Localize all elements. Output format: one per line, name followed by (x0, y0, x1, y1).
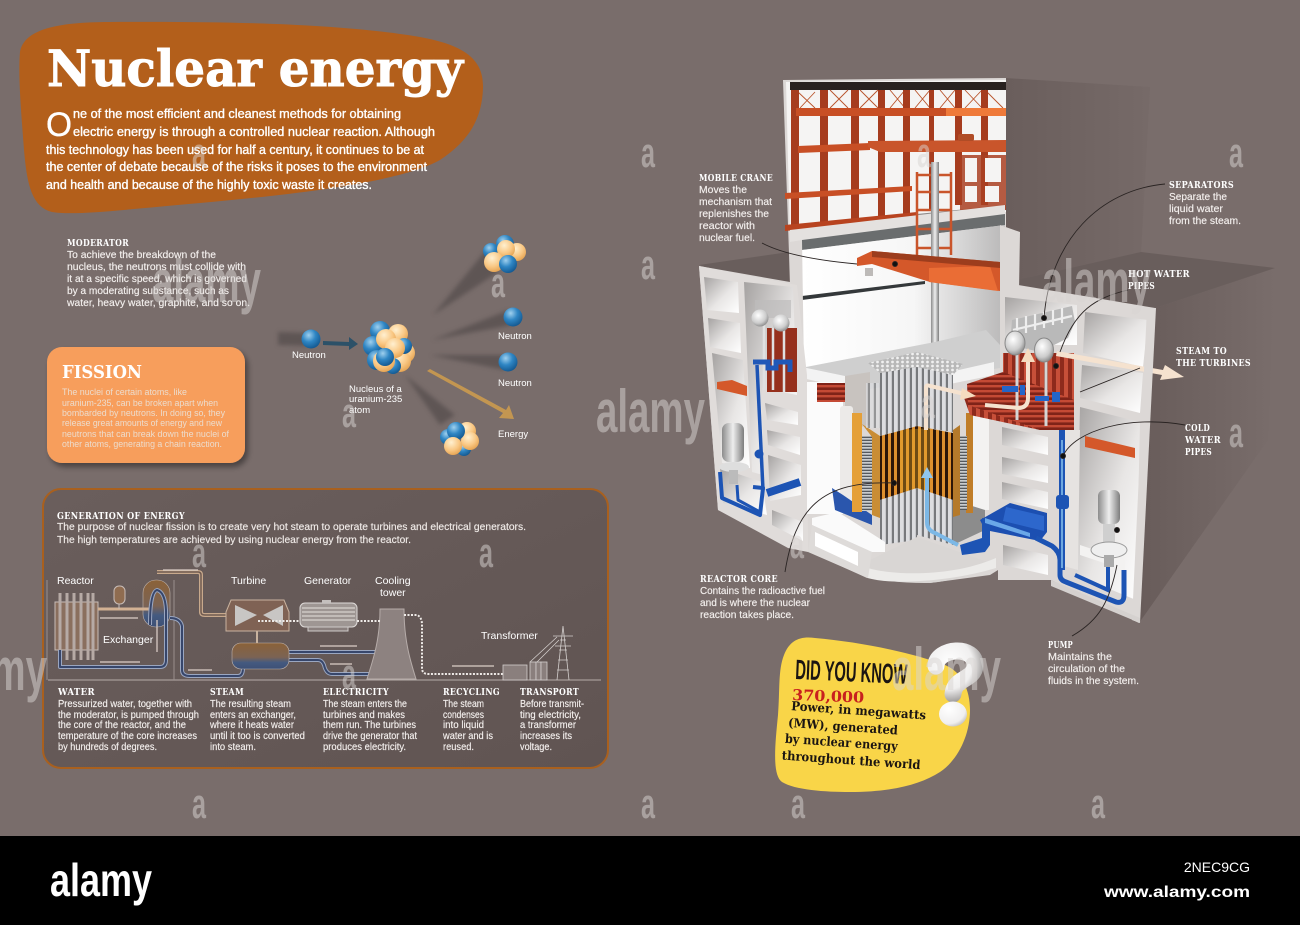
intro paragraph: O (46, 106, 72, 144)
crane rail upper (868, 140, 1006, 152)
watermarks: a (641, 780, 655, 827)
right rooms (1005, 297, 1148, 600)
reactor building cutaway (699, 78, 1275, 623)
column: recycling: The steam (443, 698, 484, 710)
reactor (55, 593, 98, 660)
column: steam (209, 688, 305, 753)
label: pump (1048, 641, 1139, 687)
panel: generation of energy: GENERATION OF ENERGY (57, 512, 185, 522)
left small crane (717, 380, 747, 396)
column: steam: until it too is converted (210, 730, 305, 742)
callout: did you know (775, 638, 975, 792)
transformer (503, 626, 573, 680)
watermarks (0, 129, 1243, 827)
watermarks: a (1229, 129, 1243, 176)
watermarks: a (1229, 409, 1243, 456)
right wall front edge (1132, 308, 1156, 623)
column: water: temperature of the core increases (58, 730, 197, 742)
column: recycling: condenses (443, 709, 484, 721)
diagram labels: Turbine (231, 575, 266, 587)
labels (292, 331, 532, 440)
footer bar (0, 836, 1300, 925)
intro paragraph: and health and because of the highly toxic waste it creates. (46, 178, 372, 192)
column: electricity: them run. The turbines (323, 719, 416, 731)
yellow blob (775, 638, 970, 792)
diagram labels (57, 575, 538, 646)
deck red pipes left (817, 383, 855, 402)
hot and cold pipes (60, 572, 405, 676)
watermarks: a (192, 129, 206, 176)
reactor deck (802, 330, 1000, 392)
rear upper wall (1006, 78, 1150, 285)
column: electricity: ELECTRICITY (323, 688, 389, 698)
leader lines (762, 184, 1185, 636)
big white room (807, 382, 843, 514)
heading: Nuclear energy: Nuclear energy (47, 39, 465, 98)
electricity lines (258, 615, 504, 674)
watermarks: alamy (892, 636, 1001, 703)
condenser (232, 643, 289, 669)
bottom edge strip (1051, 580, 1140, 623)
description (781, 698, 927, 772)
label: separators: Separate the (1169, 191, 1227, 203)
watermarks: alamy (596, 378, 705, 445)
column: steam: into steam. (210, 741, 256, 753)
left blue plenum (832, 488, 872, 525)
url: www.alamy.com (1103, 884, 1250, 901)
watermarks: a (192, 780, 206, 827)
label: reactor core: Contains the radioactive fuel (700, 585, 825, 597)
labels: uranium-235 (349, 394, 402, 405)
column: electricity (323, 688, 417, 753)
inner orange (862, 424, 880, 518)
mobile crane (857, 251, 1000, 291)
label: pump: fluids in the system. (1048, 675, 1139, 687)
label: pump: circulation of the (1048, 663, 1125, 675)
column: recycling: reused. (443, 741, 474, 753)
panel: fission: uranium-235, can be broken apart when (62, 398, 218, 408)
beams (796, 108, 1006, 116)
flow arrows (100, 570, 494, 670)
label: mobile crane: Moves the (699, 184, 747, 196)
label: mobile crane (699, 174, 773, 244)
left steam generator (752, 300, 797, 392)
neutron middle (498, 352, 518, 372)
panel: fission: The nuclei of certain atoms, like (62, 387, 187, 397)
label: hot water pipes (1128, 270, 1190, 292)
label: mobile crane: replenishes the (699, 208, 769, 220)
labels: Energy (498, 429, 528, 440)
label: pump: PUMP (1048, 641, 1073, 651)
blue pipes right (960, 430, 1124, 602)
column: recycling (442, 688, 500, 753)
diagram labels: Cooling (375, 575, 411, 587)
moderator text block: water, heavy water, graphite, and so on. (66, 297, 250, 309)
arrowhead: cold water (921, 467, 933, 478)
diagram labels: Reactor (57, 575, 94, 587)
watermarks: a (491, 259, 505, 306)
roof top right (1005, 252, 1275, 308)
label: separators (1169, 181, 1241, 227)
left blue pipes (720, 365, 800, 515)
moderator text block (66, 239, 250, 309)
column: transport: a transformer (520, 719, 576, 731)
labels: atom (349, 405, 370, 416)
watermarks: a (921, 380, 935, 427)
right steam generator (962, 306, 1075, 430)
column: steam: where it heats water (209, 719, 294, 731)
moderator text block: To achieve the breakdown of the (67, 249, 216, 261)
chart: fission chain reaction (278, 235, 532, 456)
label: cold water pipes: PIPES (1185, 448, 1212, 458)
fragment nucleus bottom (440, 422, 479, 456)
hall lower wall (790, 205, 1020, 375)
watermarks: a (1091, 780, 1105, 827)
label: mobile crane: reactor with (699, 220, 755, 232)
panel: fission: bombarded by neutrons. In doing so, they (62, 408, 225, 418)
labels: Neutron (498, 331, 532, 342)
fuel rods lower (880, 488, 917, 545)
reactor core (817, 352, 996, 583)
watermarks: alamy (1042, 248, 1151, 315)
arrow: neutron incoming (323, 337, 358, 350)
arrow: steam up (985, 362, 1028, 408)
image id: 2NEC9CG (1184, 859, 1250, 875)
arrow: steam through core (926, 385, 965, 430)
label: mobile crane: mechanism that (699, 196, 772, 208)
panel: generation of energy: The high temperatures are achieved by using nuclear energy from the reactor. (57, 534, 411, 546)
watermarks: a (641, 129, 655, 176)
generator (300, 600, 357, 631)
fuel slots (880, 426, 917, 500)
column: water (57, 688, 199, 753)
column: electricity: The steam enters the (323, 698, 407, 710)
column: water: WATER (57, 688, 95, 698)
neutron top (504, 308, 522, 326)
column: water: by hundreds of degrees. (58, 741, 157, 753)
column: transport (520, 688, 584, 753)
watermarks: a (641, 241, 655, 288)
description: (MW), generated (788, 715, 899, 738)
label: cold water pipes (1184, 424, 1221, 458)
column: transport: ting electricity, (520, 709, 581, 721)
fragment nucleus top (483, 235, 526, 273)
moderator text block: by a moderating substance, such as (67, 285, 229, 297)
exchanger vessel (143, 580, 170, 627)
labels: Neutron (498, 378, 532, 389)
panel: fission: release great amounts of energy and new (62, 418, 222, 428)
lower left platform (808, 512, 885, 578)
turbine (226, 600, 289, 631)
diagram labels: Transformer (481, 630, 538, 642)
base section silhouette (699, 78, 1155, 623)
label: hot water pipes: HOT WATER (1128, 270, 1190, 280)
label: separators: from the steam. (1169, 215, 1241, 227)
label: separators: SEPARATORS (1169, 181, 1234, 191)
label: steam to the turbines (1176, 347, 1251, 369)
column: water: Pressurized water, together with (58, 698, 192, 710)
separators (1010, 306, 1075, 352)
intro paragraph: this technology has been used for half a century, it continues to be at (46, 143, 425, 157)
label: pump: Maintains the (1048, 651, 1112, 663)
moderator text block: nucleus, the neutrons must collide with (67, 261, 246, 273)
panel: generation of energy (43, 489, 608, 768)
watermarks: a (479, 529, 493, 576)
title panel (19, 22, 483, 213)
intro paragraph: electric energy is through a controlled nuclear reaction. Although (73, 125, 435, 139)
left wall face (699, 266, 808, 552)
column: transport: Before transmit- (520, 698, 584, 710)
arrow: cold water in core (927, 475, 958, 545)
cooling tower (367, 609, 416, 679)
label: reactor core: reaction takes place. (700, 609, 794, 621)
panel: fission: FISSION (62, 362, 142, 383)
watermarks: a (342, 389, 356, 436)
right lower block side (1139, 268, 1275, 623)
label: reactor core: and is where the nuclear (700, 597, 810, 609)
column: steam: The resulting steam (210, 698, 291, 710)
orange header blob (19, 22, 483, 213)
column: transport: TRANSPORT (520, 688, 579, 698)
arrow: energy (427, 369, 514, 419)
watermarks: a (342, 650, 356, 697)
column: electricity: turbines and makes (323, 709, 405, 721)
floor arc (868, 537, 996, 583)
columns (791, 90, 988, 228)
label: steam to the turbines: STEAM TO (1176, 347, 1227, 357)
diagram: power plant (47, 570, 601, 680)
column: transport: voltage. (520, 741, 552, 753)
back gray behind core (953, 500, 985, 545)
labels: Nucleus of a (349, 384, 403, 395)
watermarks: a (917, 129, 931, 176)
label: reactor core: REACTOR CORE (700, 575, 778, 585)
watermarks: a (790, 520, 804, 567)
column: water: the core of the reactor, and the (58, 719, 186, 731)
icon: question mark (936, 651, 975, 726)
description: by nuclear energy (784, 731, 899, 754)
label: mobile crane: MOBILE CRANE (699, 174, 773, 184)
label: cold water pipes: WATER (1184, 436, 1221, 446)
diagram labels: Exchanger (103, 634, 154, 646)
description: Power, in megawatts (791, 698, 927, 722)
upper vessel (880, 410, 953, 436)
small tank (114, 586, 125, 604)
column: electricity: produces electricity. (323, 741, 406, 753)
rod top dots (868, 352, 963, 375)
watermarks: a (791, 780, 805, 827)
fuel rods upper (880, 366, 917, 436)
left pump (719, 423, 749, 484)
figure: 370,000: 370,000 (792, 686, 864, 707)
intro paragraph: the center of debate because of the risks it poses to the environment (46, 160, 428, 174)
label: separators: liquid water (1169, 203, 1223, 215)
label: mobile crane: nuclear fuel. (699, 232, 755, 244)
nucleus of uranium-235 (363, 321, 415, 374)
intro paragraph (46, 106, 435, 192)
mast ladder (917, 172, 952, 255)
trails (278, 250, 512, 425)
diagram labels: tower (380, 587, 406, 599)
right small crane (1085, 436, 1135, 458)
watermarks: alamy (152, 248, 261, 315)
right pump (1091, 490, 1127, 567)
column: water: the moderator, is pumped through (58, 709, 199, 721)
column: recycling: RECYCLING (443, 688, 500, 698)
arrow: steam to the turbines (1056, 351, 1184, 380)
column: steam: STEAM (210, 688, 244, 698)
arrowhead: core steam (960, 388, 976, 400)
watermarks: a (192, 529, 206, 576)
panel: fission (47, 347, 245, 463)
labels: Neutron (292, 350, 326, 361)
center right rooms (991, 418, 1057, 580)
left rooms (699, 266, 843, 552)
panel: fission: other atoms, generating a chain reaction. (62, 439, 222, 449)
column: steam: enters an exchanger, (210, 709, 296, 721)
intro paragraph: ne of the most efficient and cleanest methods for obtaining (73, 107, 401, 121)
panel: fission: neutrons that can break down the nuclei of (62, 429, 229, 439)
column: electricity: drive the generator that (323, 730, 417, 742)
alamy logo: alamy (50, 854, 152, 906)
column: transport: increases its (520, 730, 572, 742)
column: recycling: water and is (442, 730, 493, 742)
roof top left (699, 252, 789, 282)
upper hall (785, 80, 1006, 238)
ribs (862, 436, 872, 511)
label: reactor core (700, 575, 825, 621)
did you know heading: DID YOU KNOW (795, 654, 908, 690)
icon: neutron (302, 330, 320, 348)
arrowhead: steam up (1021, 348, 1035, 362)
column: recycling: into liquid (443, 719, 484, 731)
fuel mast column (931, 162, 939, 362)
moderator text block: it at a specific speed, which is governed (67, 273, 247, 285)
diagram labels: Generator (304, 575, 352, 587)
panel: generation of energy: The purpose of nuclear fission is to create very hot steam to operate turbines and electrical generators. (57, 521, 526, 533)
moderator text block: MODERATOR (67, 239, 129, 249)
orange shields (852, 413, 862, 512)
description: throughout the world (781, 748, 921, 772)
truss (798, 90, 1003, 108)
white shields (840, 406, 853, 509)
label: cold water pipes: COLD (1185, 424, 1210, 434)
label: steam to the turbines: THE TURBINES (1176, 359, 1251, 369)
label: hot water pipes: PIPES (1128, 282, 1155, 292)
